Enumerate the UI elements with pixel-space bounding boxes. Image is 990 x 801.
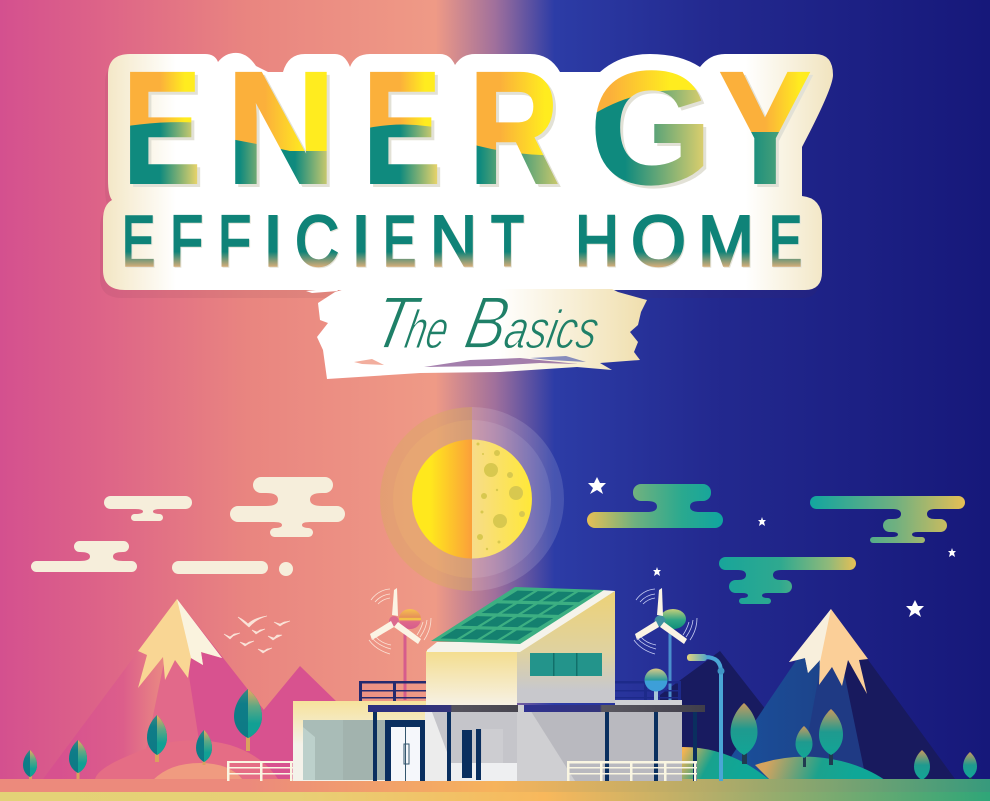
sun half: [412, 440, 472, 558]
roof fascia: [427, 590, 615, 652]
tree: [963, 752, 977, 784]
cloud 4: [172, 561, 268, 574]
white fence left: [227, 761, 293, 781]
brush streak middle: [424, 358, 578, 367]
tree: [914, 750, 930, 786]
lamp head: [687, 654, 707, 661]
solar roof frame: [431, 587, 604, 644]
stars: [588, 477, 956, 617]
right hills: [680, 747, 885, 782]
left mountains: [43, 599, 340, 779]
front door: [391, 727, 420, 781]
subtitle: EFFICIENT HOME: C: [295, 202, 339, 282]
solar panels: [440, 591, 595, 640]
subtitle: The Basics: B: [459, 281, 516, 364]
title: ENERGY: G: [590, 38, 712, 217]
night cloud 3: [719, 557, 856, 604]
turbine hub: [389, 616, 399, 626]
lamp post: [654, 690, 658, 701]
garage glass reflection: [303, 720, 343, 780]
left hills: [95, 740, 278, 780]
subtitle: EFFICIENT HOME: H: [575, 202, 619, 282]
main mountain left face: [722, 609, 831, 779]
lower wall light wedge: [425, 712, 450, 781]
lower wall shadow: [527, 712, 682, 781]
subtitle: EFFICIENT HOME: F: [170, 202, 203, 282]
subtitle: EFFICIENT HOME: F: [218, 202, 251, 282]
entry door side: [476, 729, 481, 780]
night cloud 1: [587, 484, 723, 528]
turbine ball: [660, 609, 686, 629]
main mountain centre face: [140, 599, 215, 779]
ground lower band: [0, 792, 990, 801]
garage glass lighter panel: [303, 727, 315, 780]
turbine ball: [399, 609, 421, 629]
day clouds: [31, 477, 345, 576]
cloud dot: [279, 562, 293, 576]
tree: [796, 726, 812, 767]
moon craters: [476, 442, 525, 550]
moon half glow: [472, 407, 564, 591]
subtitle: EFFICIENT HOME: I: [351, 202, 371, 282]
subtitle: The Basics: asics: [500, 300, 604, 360]
tree: [196, 730, 212, 765]
tree: [147, 715, 167, 762]
turbine post: [668, 632, 672, 700]
snow cap: [138, 599, 222, 688]
wall lighter strip: [517, 705, 575, 781]
subtitle: EFFICIENT HOME: T: [491, 202, 524, 282]
subtitle: EFFICIENT HOME: N: [430, 202, 477, 282]
title: ENERGY: E: [363, 38, 441, 217]
turbine post: [404, 632, 406, 700]
night clouds: [587, 484, 965, 604]
tree: [234, 689, 262, 751]
canopy left: [368, 705, 518, 712]
upper window: [530, 653, 602, 676]
garage glass: [303, 720, 385, 780]
main mountain right face: [177, 599, 318, 779]
cloud 1: [104, 496, 192, 521]
title: ENERGY: R: [469, 38, 559, 217]
ground upper band: [0, 779, 990, 792]
front hill: [755, 757, 885, 782]
turbine hub: [654, 616, 666, 626]
turbine blades: [370, 588, 421, 644]
columns: [373, 711, 697, 781]
turbine wind arcs: [369, 589, 431, 654]
sun half glow: [380, 407, 472, 591]
right trees: [730, 703, 977, 786]
sun and moon: [380, 407, 564, 591]
snow cap light face: [789, 609, 831, 673]
main mountain right face: [831, 609, 955, 779]
balcony railing left: [359, 681, 427, 701]
garage block: [293, 701, 428, 781]
subtitle: EFFICIENT HOME: E: [383, 202, 416, 282]
title sticker panel: [103, 53, 833, 290]
cloud 2: [230, 477, 345, 537]
right mountains: [660, 609, 955, 779]
street lamp: [687, 654, 724, 781]
title: ENERGY: Y: [719, 38, 811, 217]
back dark mountain: [660, 651, 770, 779]
main mountain centre face: [800, 609, 870, 779]
brush streak left: [354, 359, 384, 365]
globe lamp on balcony: [644, 668, 668, 701]
rear hill: [680, 747, 772, 782]
title: ENERGY: N: [226, 38, 336, 217]
tree: [69, 740, 87, 779]
subtitle: EFFICIENT HOME: O: [631, 202, 686, 282]
front hill: [153, 763, 243, 780]
balcony floor edge: [615, 700, 682, 705]
subtitle: The Basics: he: [401, 300, 454, 360]
lamp pole: [705, 657, 721, 781]
brush body: [317, 289, 647, 379]
house: [293, 587, 705, 781]
brush streak right: [530, 356, 586, 362]
main mountain left face: [43, 599, 177, 779]
subtitle: EFFICIENT HOME: M: [698, 202, 754, 282]
subtitle: EFFICIENT HOME: E: [122, 202, 155, 282]
door split and handles: [404, 727, 409, 781]
balcony railing right: [615, 681, 681, 701]
lamp joint: [718, 668, 724, 674]
sun half inner glow: [393, 420, 472, 578]
lamp globe: [644, 668, 668, 692]
subtitle: EFFICIENT HOME: I: [263, 202, 283, 282]
canopy right: [524, 705, 705, 712]
entry panel: [482, 729, 503, 763]
white fence right: [567, 761, 697, 781]
tree: [23, 750, 37, 780]
cloud 3: [31, 541, 137, 572]
moon half: [472, 440, 532, 558]
tree: [730, 703, 758, 764]
left trees: [23, 689, 262, 780]
brush stroke banner: [306, 288, 647, 379]
upper right wall: [517, 591, 615, 703]
subtitle: The Basics: T: [366, 281, 428, 364]
turbine wind arcs: [634, 589, 697, 654]
lower wall: [425, 705, 682, 781]
entry door dark: [462, 730, 472, 778]
upper left wall: [426, 651, 517, 705]
front door frame: [385, 720, 425, 781]
moon half inner glow: [472, 420, 551, 578]
night cloud 2: [810, 496, 965, 543]
snow cap light face: [177, 599, 222, 665]
left wind turbine: [369, 588, 431, 700]
brush left top wisp: [306, 288, 338, 293]
title: ENERGY: E: [123, 38, 201, 217]
rear hill: [95, 740, 278, 779]
birds: [224, 616, 290, 653]
snow cap: [789, 609, 868, 694]
right wind turbine: [634, 588, 697, 700]
subtitle: EFFICIENT HOME: E: [769, 202, 802, 282]
tree: [819, 709, 843, 765]
small back mountain: [262, 666, 340, 779]
entry base: [450, 763, 517, 781]
ground: [0, 779, 990, 801]
turbine blades: [635, 588, 687, 644]
